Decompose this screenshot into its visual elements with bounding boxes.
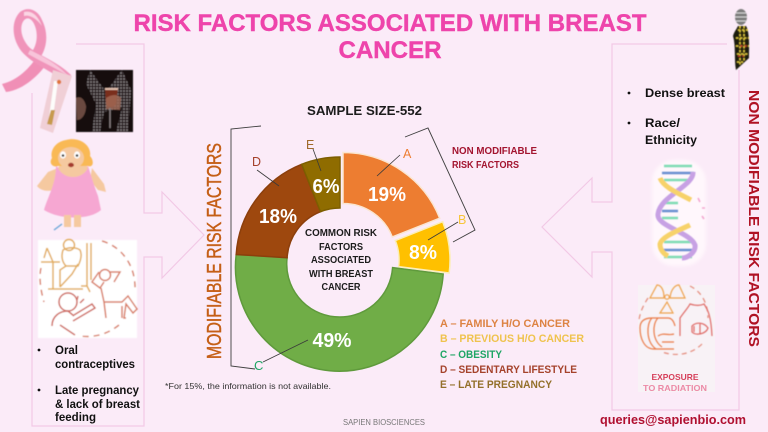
label: 8%: 8% [409, 242, 437, 264]
icon: sedentary lifestyle line drawing [38, 240, 137, 338]
legend: D – SEDENTARY LIFESTYLE [440, 364, 577, 376]
donut centre text: ASSOCIATED [311, 254, 371, 266]
donut centre text [305, 227, 377, 293]
legend: E – LATE PREGNANCY [440, 379, 553, 391]
heading: sample size: SAMPLE SIZE-552 [307, 103, 422, 118]
text block: non modifiable factors list [628, 88, 725, 147]
text block: modifiable factors list: Oral [55, 345, 78, 357]
icon: exposure to radiation: TO RADIATION [643, 383, 707, 393]
heading: non modifiable risk factors: NON MODIFIABLE RISK FACTORS [745, 90, 762, 347]
text block: modifiable factors list [38, 345, 140, 424]
segment C: obesity 49% [235, 254, 443, 371]
heading: modifiable risk factors: MODIFIABLE RISK FACTORS [204, 143, 226, 359]
text block: non modifiable factors list: Race/ [645, 118, 681, 130]
callout: non modifiable risk factors: RISK FACTORS [452, 160, 519, 171]
arrow panel: non modifiable risk factors [542, 44, 739, 410]
text block: non modifiable factors list: Ethnicity [645, 135, 698, 147]
icon: overweight woman in pink dress [37, 139, 106, 230]
callout letters and leader lines [252, 138, 466, 373]
donut chart [235, 152, 450, 371]
icon: fingerprint figure [733, 9, 749, 70]
icon: cigarette [40, 70, 72, 133]
title: RISK FACTORS ASSOCIATED WITH BREAST [134, 10, 647, 37]
segment B: previous history 8% [395, 222, 450, 273]
callout letters and leader lines: C [254, 358, 263, 373]
title [134, 10, 647, 64]
callout: non modifiable risk factors [452, 146, 537, 171]
callout letters and leader lines: A [403, 147, 412, 161]
footer: sapien biosciences: SAPIEN BIOSCIENCES [343, 418, 425, 427]
legend [440, 318, 584, 391]
bracket: non modifiable factors [405, 128, 475, 242]
text block: modifiable factors list: & lack of breast [55, 399, 140, 411]
bracket: modifiable factors [231, 126, 261, 369]
segment E: late pregnancy 6% [302, 157, 340, 212]
callout: non modifiable risk factors: NON MODIFIABLE [452, 146, 537, 157]
text block: modifiable factors list: contraceptives [55, 359, 135, 371]
legend: A – FAMILY H/O CANCER [440, 318, 570, 330]
label: 19%: 19% [368, 184, 406, 206]
callout letters and leader lines: D [252, 155, 261, 169]
icon: DNA helix [652, 160, 706, 266]
label: 6%: 6% [312, 176, 340, 198]
donut centre text: WITH BREAST [309, 268, 374, 280]
title: CANCER [338, 37, 442, 64]
image: woman holding a glass of wine [76, 70, 133, 132]
icon: exposure to radiation [638, 285, 715, 393]
text block: modifiable factors list: Late pregnancy [55, 385, 140, 397]
label: 18%: 18% [259, 206, 297, 228]
callout letters and leader lines: E [306, 138, 314, 152]
arrow panel: modifiable risk factors [32, 44, 204, 426]
icon: exposure to radiation: EXPOSURE [652, 372, 699, 382]
legend: C – OBESITY [440, 349, 503, 361]
donut centre text: FACTORS [319, 241, 363, 253]
segment D: sedentary lifestyle 18% [236, 164, 320, 258]
label: 49%: 49% [312, 330, 352, 352]
legend: B – PREVIOUS H/O CANCER [440, 333, 584, 345]
donut centre text: COMMON RISK [305, 227, 377, 239]
donut centre text: CANCER [322, 281, 361, 293]
icon: pink ribbon [2, 9, 71, 92]
footnote: *For 15%, the information is not available. [165, 381, 331, 391]
text block: modifiable factors list: feeding [55, 412, 96, 424]
segment A: family history 19% [343, 152, 440, 237]
contact email: queries@sapienbio.com [600, 413, 746, 427]
text block: non modifiable factors list: Dense breast [645, 88, 725, 100]
callout letters and leader lines: B [458, 213, 466, 227]
